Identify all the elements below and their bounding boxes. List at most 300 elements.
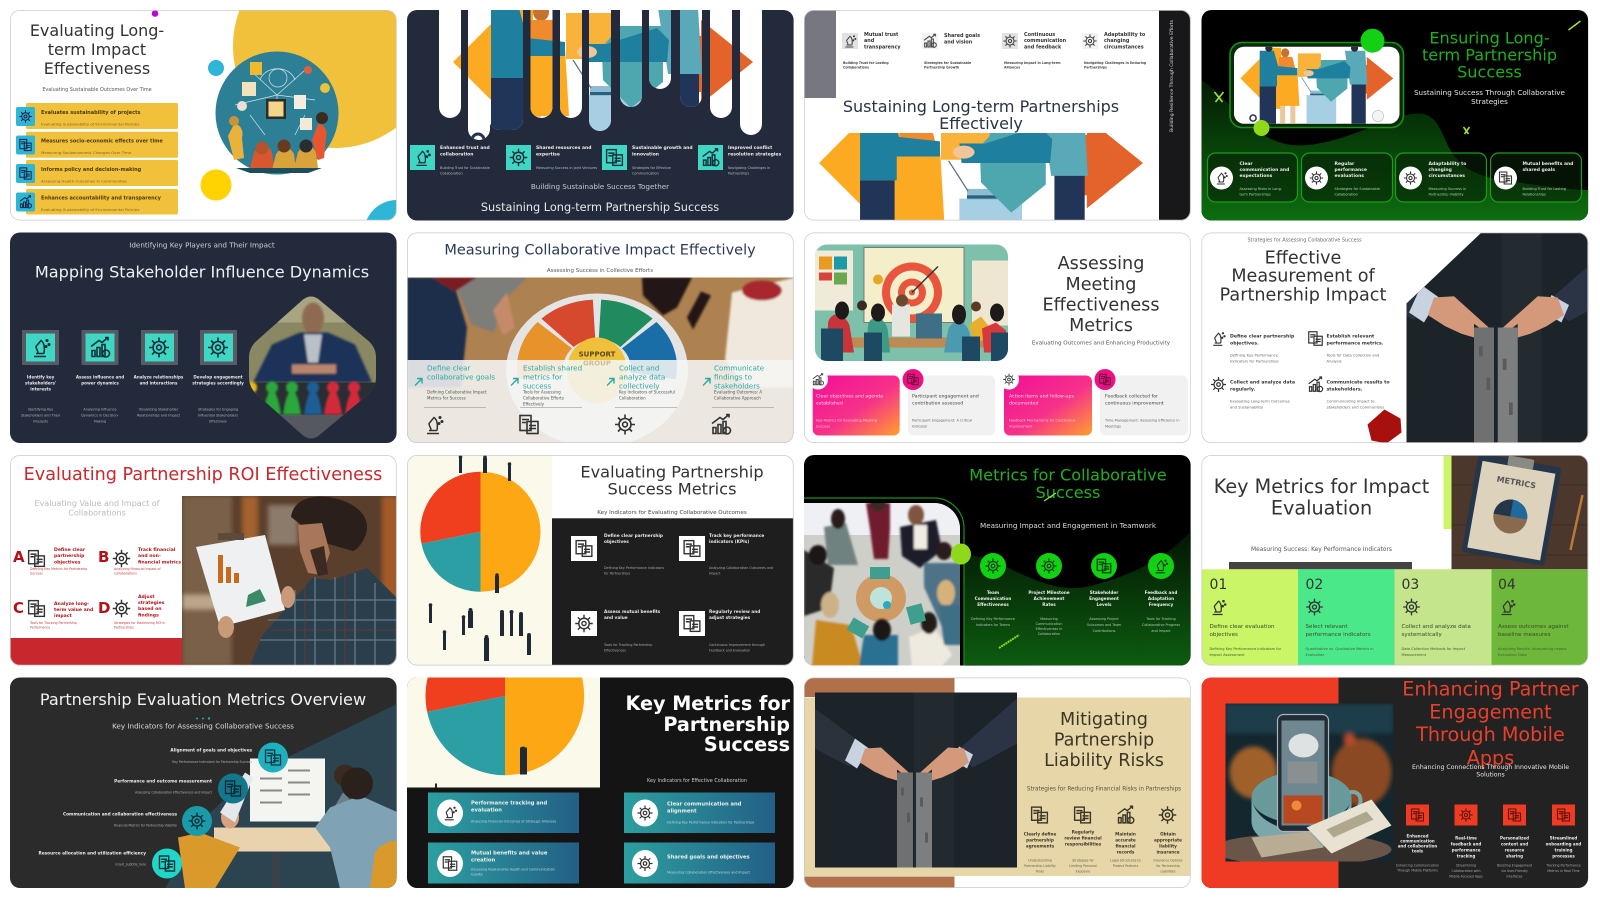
photo: metrics clipboard: METRICS xyxy=(1496,475,1537,490)
four risk strategies: Maintain xyxy=(1115,832,1136,836)
title: Enhancing Partner xyxy=(1402,678,1579,700)
ABCD items: impact xyxy=(54,613,72,619)
four teal cards: Assessing Relationship Health and Communication xyxy=(471,868,555,872)
dark panel with four items xyxy=(552,518,795,666)
slide 4: Ensuring Long-term Partnership Success xyxy=(1202,10,1590,221)
four metric cards: Improvement xyxy=(1009,424,1033,428)
four stakeholder steps: Assess influence and xyxy=(76,374,124,380)
four measurement items: Defining Key Performance xyxy=(1230,354,1279,358)
title: Partnership xyxy=(663,713,790,736)
subtitle: Strategies for Reducing Financial Risks in Partnerships xyxy=(1027,786,1181,792)
dark panel with four items: objectives xyxy=(604,539,629,545)
subtitle: Measuring Success: Key Performance Indicators xyxy=(1251,547,1392,553)
hexagon photo: blurred man and pawns xyxy=(249,296,376,438)
subtitle: Sustaining Success Through Collaborative xyxy=(1414,88,1566,97)
translucent panel with four columns: Define clear xyxy=(427,364,471,372)
four teal icon items: Strategies for Effective xyxy=(632,166,671,170)
list: 4 yellow rows xyxy=(16,103,178,214)
four items: Mutual trust xyxy=(864,32,899,38)
list: 4 yellow rows: Measures socio-economic effects over time xyxy=(41,138,163,144)
four green icon metrics: Communication xyxy=(975,596,1011,601)
dark panel with four items: Defining Key Performance Indicators xyxy=(604,566,664,570)
four red icon features: tracking xyxy=(1457,854,1475,858)
title: Sustaining Long-term Partnership Success xyxy=(481,201,719,214)
four metrics with teal badges: insert_subtitle_here xyxy=(116,862,146,866)
four green icon metrics: Effectiveness in xyxy=(1036,627,1062,631)
four metrics with teal badges: Assessing Collaboration Effectiveness and Impact xyxy=(135,790,213,794)
four risk strategies: Insurance Options xyxy=(1154,858,1183,862)
title: Evaluating Long- xyxy=(30,21,164,40)
four metric cards: Clear objectives and agenda xyxy=(816,394,883,400)
four numbered columns: objectives xyxy=(1210,632,1238,638)
four teal cards: evaluation xyxy=(471,808,502,814)
ABCD items: D xyxy=(98,599,110,617)
title: Success xyxy=(1036,483,1100,502)
four red icon features: Personalized xyxy=(1500,836,1529,840)
four measurement items: Analysis xyxy=(1326,360,1342,364)
subtitle: Key Indicators for Evaluating Collaborative Outcomes xyxy=(597,510,747,516)
translucent panel with four columns: findings to xyxy=(714,372,752,382)
four green cards: Building Trust for Lasting xyxy=(1522,187,1566,191)
four red icon features: performance xyxy=(1452,848,1481,852)
dark panel with four items: Impact xyxy=(709,572,721,576)
four stakeholder steps: Visualizing Stakeholder xyxy=(139,408,179,412)
four stakeholder steps: power dynamics xyxy=(81,380,119,386)
four teal icon items: Improved conflict xyxy=(728,145,773,151)
four teal cards: Mutual benefits and value xyxy=(471,850,548,856)
four red icon features: Streamlining xyxy=(1456,864,1476,868)
translucent panel with four columns: Tools for Assessing xyxy=(522,390,561,394)
slide 1: Evaluating Long-term Impact Effectiveness xyxy=(10,10,397,220)
four red icon features: processes xyxy=(1552,854,1575,858)
translucent panel with four columns: Establish shared xyxy=(523,364,582,372)
four green cards: performance xyxy=(1334,167,1367,173)
photo: team seated in a circle xyxy=(804,495,971,666)
four measurement items: Communicate results to xyxy=(1326,380,1390,386)
translucent panel with four columns: Key Indicators of Successful xyxy=(619,390,675,394)
four green icon metrics: Tools for Tracking xyxy=(1145,617,1176,621)
four stakeholder steps: Stakeholders and Their xyxy=(21,414,61,418)
four red icon features: Tracking Performance xyxy=(1545,864,1581,868)
four green icon metrics: Contributions xyxy=(1093,629,1116,633)
four green icon metrics: Feedback and xyxy=(1145,590,1177,595)
ABCD items: Partnerships xyxy=(114,626,134,630)
title: Mapping Stakeholder Influence Dynamics xyxy=(35,262,369,282)
subtitle: Key Indicators for Effective Collaboration xyxy=(647,778,747,784)
title: term Impact xyxy=(48,40,146,59)
title: Partnership Evaluation Metrics Overview xyxy=(40,690,366,709)
four metric cards: Participant engagement and xyxy=(912,394,979,400)
four items: Shared goals xyxy=(944,33,980,39)
four red icon features: training xyxy=(1555,848,1573,852)
four measurement items: Communicating Impact to xyxy=(1326,400,1375,404)
four items: and vision xyxy=(944,40,973,46)
four red icon features: Collaboration with xyxy=(1451,869,1481,873)
four green icon metrics: Levels xyxy=(1096,602,1112,607)
slide 5: Mapping Stakeholder Influence Dynamics xyxy=(10,232,398,443)
slide 10: Evaluating Partnership Success Metrics xyxy=(407,455,795,666)
four green cards xyxy=(1208,153,1582,202)
ABCD items: Define clear xyxy=(54,547,86,553)
four stakeholder steps: Interests xyxy=(33,420,48,424)
four numbered columns: Measurement xyxy=(1402,653,1427,657)
four metric cards: contribution assessed xyxy=(912,400,963,406)
four metric cards: Participant Engagement: A Critical xyxy=(912,418,972,422)
dark panel with four items: Continuous Improvement through xyxy=(709,643,765,647)
icon: network circle with people xyxy=(216,52,338,174)
title: Evaluation xyxy=(1271,496,1372,520)
four red icon features: Interfaces xyxy=(1507,874,1523,878)
four green icon metrics: Team xyxy=(987,590,1000,595)
four numbered columns: 04 xyxy=(1498,577,1516,593)
title: Success xyxy=(704,733,790,756)
four measurement items: performance metrics. xyxy=(1326,340,1384,346)
subtitle: Measuring Impact and Engagement in Teamwork xyxy=(980,521,1157,530)
four numbered columns: 03 xyxy=(1402,577,1419,593)
dark panel with four items: Analyzing Collaboration Outcomes and xyxy=(709,566,773,570)
four risk strategies: Limiting Personal xyxy=(1069,864,1097,868)
four risk strategies xyxy=(1024,806,1183,874)
four stakeholder steps: Strategies for Engaging xyxy=(198,408,238,412)
title: Measurement of xyxy=(1231,266,1375,286)
four green icon metrics xyxy=(971,553,1180,636)
title: Metrics xyxy=(1069,316,1133,336)
ABCD items: Success xyxy=(30,572,43,576)
dark panel with four items: Feedback and Evaluation xyxy=(709,648,750,652)
title: Evaluating Partnership xyxy=(580,462,764,482)
ABCD items: A xyxy=(13,548,25,566)
four teal icon items: innovation xyxy=(632,152,659,158)
four green cards: evaluations xyxy=(1334,173,1364,179)
translucent panel with four columns: Defining Collaborative Impact xyxy=(427,390,487,394)
four metric cards: Action items and follow-ups xyxy=(1009,394,1074,400)
four red icon features: Through Mobile Platforms xyxy=(1396,868,1438,872)
four metric cards: established xyxy=(816,400,843,406)
four numbered columns: Evaluation xyxy=(1306,653,1324,657)
four numbered columns: 01 xyxy=(1210,577,1227,593)
four risk strategies: Clearly define xyxy=(1024,832,1056,836)
title: Partnership xyxy=(1054,730,1154,750)
four risk strategies: responsibilities xyxy=(1065,842,1102,846)
slide 6: Measuring Collaborative Impact Effectively xyxy=(407,232,795,448)
four red icon features: and collaboration xyxy=(1398,844,1437,848)
ABCD items: Track financial xyxy=(138,547,176,553)
four stakeholder steps: strategies accordingly xyxy=(192,380,244,386)
four teal cards xyxy=(428,792,775,884)
dark panel with four items: indicators (KPIs) xyxy=(709,539,749,545)
four risk strategies: accurate xyxy=(1115,838,1136,842)
translucent panel with four columns: Communicate xyxy=(714,364,765,372)
ABCD items: Tools for Tracking Partnership xyxy=(29,621,77,625)
four teal cards: Clear communication and xyxy=(667,802,742,808)
four risk strategies: agreements xyxy=(1026,844,1055,848)
four teal cards: Defining Key Performance Indicators for Partnerships xyxy=(667,820,755,824)
slide 11: Metrics for Collaborative Success xyxy=(804,455,1192,666)
four green cards: Assessing Risks in Long- xyxy=(1240,187,1283,191)
four numbered columns xyxy=(1202,569,1590,666)
four numbered columns: Select relevant xyxy=(1306,624,1348,630)
four red icon features: Metrics in Real Time xyxy=(1547,869,1580,873)
four teal icon items: Sustainable growth and xyxy=(632,145,693,151)
four numbered columns: Quantitative vs. Qualitative Metrics in xyxy=(1306,647,1374,651)
four green cards: communication and xyxy=(1240,167,1289,173)
translucent panel with four columns: Effectively xyxy=(523,402,545,406)
title: Success xyxy=(1457,62,1522,82)
slide 16: Enhancing Partner Engagement Through Mobile Apps xyxy=(1202,678,1589,888)
four green icon metrics: Engagement xyxy=(1089,596,1119,601)
four risk strategies: Risks xyxy=(1036,870,1044,874)
title: Through Mobile xyxy=(1415,723,1565,746)
four items: changing xyxy=(1104,38,1130,44)
four stakeholder steps: Identify key xyxy=(27,374,55,380)
four stakeholder steps: Effectively xyxy=(209,420,227,424)
title: Ensuring Long- xyxy=(1429,28,1550,48)
four numbered columns: Impact Assessment xyxy=(1210,653,1245,657)
four red icon features: resource xyxy=(1505,848,1525,852)
photo: hands on pillars xyxy=(1406,232,1588,443)
four risk strategies: partnership xyxy=(1026,838,1054,842)
four risk strategies: Liabilities xyxy=(1160,870,1176,874)
four green cards: Relationships xyxy=(1522,192,1546,196)
four green icon metrics: Defining Key Performance xyxy=(971,617,1015,621)
four green icon metrics: Adaptation xyxy=(1148,596,1174,601)
ABCD items: Analyzing Financial Impact of xyxy=(114,567,161,571)
list: 4 yellow rows: Evaluating Sustainability of Environmental Policies xyxy=(41,122,139,126)
dark panel with four items: Effectiveness xyxy=(604,648,626,652)
slide 7: Assessing Meeting Effectiveness Metrics xyxy=(804,232,1192,443)
subtitle: Building Sustainable Success Together xyxy=(531,182,669,191)
dark panel with four items: Track key performance xyxy=(709,533,764,539)
dark panel with four items: Assess mutual benefits xyxy=(604,609,661,615)
subtitle: Assessing Success in Collective Efforts xyxy=(547,268,653,274)
four measurement items xyxy=(1211,332,1390,410)
translucent panel with four columns: collaborative goals xyxy=(427,372,495,382)
four green icon metrics: Rates xyxy=(1042,602,1056,607)
four items: Alliances xyxy=(1004,66,1020,70)
four stakeholder steps: Analyze relationships xyxy=(134,374,184,380)
translucent panel with four columns: Evaluating Outcomes: A xyxy=(714,390,762,394)
slide 14: Key Metrics for Partnership Success xyxy=(407,617,794,888)
four metrics with teal badges: Alignment of goals and objectives xyxy=(170,748,252,754)
right sidebar with vertical text: Building Resilience Through Collaborative Efforts xyxy=(1169,19,1175,132)
ABCD items: findings xyxy=(138,612,159,618)
slide 2: Sustaining Long-term Partnership Success xyxy=(407,0,794,220)
four green icon metrics: Project Milestone xyxy=(1028,590,1070,595)
ABCD items: Analyze long- xyxy=(54,601,89,607)
translucent panel with four columns: Collaboration xyxy=(619,396,646,400)
four measurement items: Define clear partnership xyxy=(1230,334,1295,340)
title: Effectiveness xyxy=(1042,296,1160,316)
dark panel with four items: for Partnerships xyxy=(604,572,630,576)
striped handshake illustration xyxy=(439,10,762,140)
title: Measuring Collaborative Impact Effectively xyxy=(444,242,756,258)
ABCD items: objectives xyxy=(54,560,81,566)
four stakeholder steps: Relationships and Impact xyxy=(137,414,181,418)
translucent panel with four columns: success xyxy=(523,382,551,390)
four items: Measuring Impact in Long-term xyxy=(1004,61,1061,65)
four red icon features: via User-Friendly xyxy=(1501,869,1528,873)
list: 4 yellow rows: Measuring Socioeconomic Changes Over Time xyxy=(41,150,132,155)
four teal icon items: Navigating Challenges in xyxy=(728,166,770,170)
four teal icon items: Partnerships xyxy=(728,172,749,176)
photo: hands on pillars xyxy=(815,692,1019,872)
four teal cards: Quality xyxy=(471,872,483,876)
ABCD items: term value and xyxy=(54,607,93,613)
four items: Partnerships xyxy=(1084,66,1107,70)
slide 13: Partnership Evaluation Metrics Overview xyxy=(10,678,398,888)
ABCD items: C xyxy=(13,599,24,617)
four risk strategies: review financial xyxy=(1064,836,1102,840)
four items: Continuous xyxy=(1024,32,1055,38)
four red icon features: sharing xyxy=(1506,854,1523,858)
four green cards: Partnership Viability xyxy=(1428,192,1464,196)
four stakeholder steps: Making xyxy=(94,420,106,424)
four numbered columns: Defining Key Performance Indicators for xyxy=(1210,647,1282,651)
four items xyxy=(842,32,1147,70)
four items: communication xyxy=(1024,38,1067,44)
four stakeholder steps: Dynamics in Decision- xyxy=(81,414,120,418)
framed handshake image xyxy=(1230,29,1404,136)
four metrics with teal badges xyxy=(38,742,288,878)
subtitle: Key Indicators for Assessing Collaborative Success xyxy=(112,722,294,730)
dark panel with four items: Tools for Tracking Partnership xyxy=(603,643,652,647)
four numbered columns: Assess outcomes against xyxy=(1498,624,1569,630)
ABCD items: and non- xyxy=(138,553,161,559)
subtitle: Strategies for Assessing Collaborative Success xyxy=(1247,238,1362,244)
four green icon metrics: Outcomes and Team xyxy=(1087,623,1122,627)
four measurement items: regularly. xyxy=(1230,386,1255,392)
four measurement items: stakeholders. xyxy=(1326,386,1363,392)
four teal icon items: Building Trust for Sustainable xyxy=(440,166,490,170)
translucent panel with four columns: Collaborative Approach xyxy=(714,396,761,400)
four measurement items: Tools for Data Collection and xyxy=(1326,354,1379,358)
four red icon features xyxy=(1396,804,1581,878)
four risk strategies: Legal Structures to xyxy=(1110,858,1141,862)
translucent panel with four columns: analyze data xyxy=(619,372,665,382)
four red icon features: Real-time xyxy=(1455,836,1477,840)
four stakeholder steps: Influential Stakeholders xyxy=(198,414,238,418)
translucent panel with four columns: stakeholders xyxy=(714,382,760,390)
four risk strategies: appropriate xyxy=(1154,838,1182,842)
four green cards: shared goals xyxy=(1522,167,1555,173)
four stakeholder steps: interests xyxy=(30,386,51,392)
four teal cards: creation xyxy=(471,858,495,864)
title: Assessing xyxy=(1058,254,1144,274)
ABCD items: Collaborations xyxy=(114,572,137,576)
right sidebar with vertical text xyxy=(1159,10,1192,221)
four green icon metrics: Measuring xyxy=(1040,617,1058,621)
four items: Building Trust for Lasting xyxy=(843,61,889,65)
four red icon features: onboarding and xyxy=(1546,842,1581,846)
four green icon metrics: Collaboration xyxy=(1038,632,1060,636)
four teal cards: Measuring Collaboration Effectiveness and Impact xyxy=(667,870,751,874)
subtitle: Evaluating Sustainable Outcomes Over Time xyxy=(42,87,152,93)
four green icon metrics: and Impact xyxy=(1151,629,1171,633)
title: Apps xyxy=(1467,746,1514,770)
four numbered columns: systematically xyxy=(1402,632,1443,638)
subtitle: Enhancing Connections Through Innovative Mobile xyxy=(1412,764,1569,771)
four teal cards: Shared goals and objectives xyxy=(667,854,750,860)
dark panel with four items: and value xyxy=(604,615,628,621)
illustration: team around target xyxy=(815,244,1008,362)
four red icon features: Enhanced xyxy=(1407,834,1429,838)
title: Evaluating Partnership ROI Effectiveness xyxy=(24,465,382,485)
four items: Navigating Challenges in Enduring xyxy=(1084,61,1147,65)
four risk strategies: Exposure xyxy=(1076,870,1090,874)
title: Engagement xyxy=(1429,700,1552,724)
four risk strategies: Understanding xyxy=(1028,858,1052,862)
title: Partnership Impact xyxy=(1220,286,1386,306)
four risk strategies: Obtain xyxy=(1160,832,1176,836)
ABCD items: financial metrics xyxy=(138,560,181,566)
four green cards: Strategies for Sustainable xyxy=(1334,187,1380,191)
ABCD items: Performance xyxy=(30,626,50,630)
four teal icon items: Collaboration xyxy=(440,172,463,176)
subtitle: Solutions xyxy=(1476,772,1505,778)
ABCD items: Strategies for Maximizing ROI in xyxy=(114,621,165,625)
four risk strategies: insurance xyxy=(1156,850,1180,854)
four metric cards: Indicator xyxy=(912,424,928,428)
title: Effectively xyxy=(939,114,1023,133)
title: Success Metrics xyxy=(607,480,737,498)
four numbered columns: Evaluation Data xyxy=(1498,653,1527,657)
ABCD items: B xyxy=(98,548,109,566)
four risk strategies: Protect Partners xyxy=(1113,864,1139,868)
four items: and feedback xyxy=(1024,44,1062,50)
title: Sustaining Long-term Partnerships xyxy=(843,97,1119,116)
dark panel with four items: adjust strategies xyxy=(709,615,751,621)
translucent panel with four columns: GROUP xyxy=(583,360,611,368)
four stakeholder steps: and interactions xyxy=(140,380,178,386)
four numbered columns: Data Collection Methods for Impact xyxy=(1402,647,1466,651)
four green cards: Collaboration xyxy=(1334,192,1358,196)
four metric cards: continuous improvement xyxy=(1105,400,1164,406)
four teal icon items xyxy=(410,145,781,176)
ABCD items: Defining Key Metrics for Partnership xyxy=(30,567,87,571)
photo: support group wheel xyxy=(407,278,795,448)
red hexagon xyxy=(1368,410,1402,444)
four items: Strategies for Sustainable xyxy=(924,61,971,65)
four green icon metrics: Indicators for Teams xyxy=(976,623,1010,627)
four green cards: Mutual benefits and xyxy=(1522,161,1573,167)
list: 4 yellow rows: Evaluates sustainability of projects xyxy=(41,110,141,116)
four metric cards: Time Management: Assessing Efficiency in xyxy=(1104,418,1180,422)
title: term Partnership xyxy=(1422,46,1557,64)
four teal icon items: Measuring Success in Joint Ventures xyxy=(536,166,597,170)
four green cards: Clear xyxy=(1240,161,1253,167)
four green icon metrics: Achievement xyxy=(1034,596,1064,601)
four items: and xyxy=(864,38,875,44)
title: Effectiveness xyxy=(44,59,150,78)
four numbered columns: Define clear evaluation xyxy=(1210,624,1275,630)
four green icon metrics: Assessing Project xyxy=(1089,617,1119,621)
list: 4 yellow rows: Enhances accountability and transparency xyxy=(41,196,162,202)
subtitle: Evaluating Value and Impact of xyxy=(35,499,160,508)
ABCD items: partnership xyxy=(54,553,85,559)
title: Mitigating xyxy=(1060,710,1148,730)
four teal icon items: collaboration xyxy=(440,152,473,158)
illustration: meeting at a table xyxy=(165,704,398,888)
four items: Collaborations xyxy=(843,66,869,70)
title: Liability Risks xyxy=(1044,751,1164,771)
list: 4 yellow rows: Informs policy and decision-making xyxy=(41,167,142,173)
four numbered columns: Collect and analyze data xyxy=(1402,624,1471,630)
title: Key Metrics for Impact xyxy=(1214,475,1430,498)
four red icon features: Enhancing Communication xyxy=(1396,864,1439,868)
four red icon features: tools xyxy=(1412,848,1424,854)
four measurement items: Stakeholders and Communities xyxy=(1326,406,1384,410)
title: Metrics for Collaborative xyxy=(969,466,1167,484)
